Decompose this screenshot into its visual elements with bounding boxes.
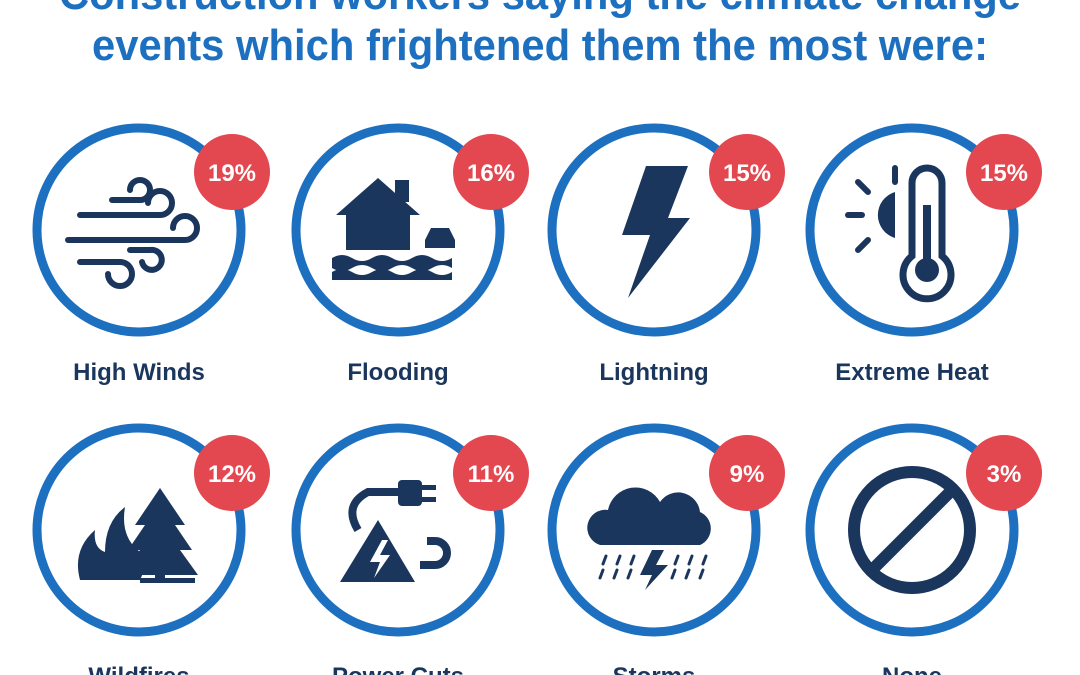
badge: 9% (730, 461, 764, 488)
panel: none (810, 428, 1042, 675)
badge (966, 134, 1042, 210)
icon: flooded house (332, 178, 455, 280)
label: Lightning (599, 359, 709, 386)
icon: fire and tree (78, 488, 198, 583)
icon: sun thermometer (848, 168, 951, 299)
label: Flooding (347, 359, 449, 386)
badge: 15% (980, 160, 1028, 187)
badge (453, 134, 529, 210)
label: High Winds (73, 359, 205, 386)
badge: 3% (987, 461, 1021, 488)
badge (709, 435, 785, 511)
panel: lightning (552, 128, 785, 386)
panel: wildfires (37, 428, 270, 675)
title (59, 0, 1021, 70)
badge (194, 134, 270, 210)
badge: 16% (467, 160, 515, 187)
badge: 19% (208, 160, 256, 187)
badge (453, 435, 529, 511)
panel: high winds (37, 128, 270, 386)
panel: extreme heat (810, 128, 1042, 386)
badge: 12% (208, 461, 256, 488)
icon: wind (68, 180, 197, 286)
title: events which frightened them the most were: (92, 21, 988, 70)
icon: lightning bolt (622, 166, 690, 298)
panel: power cuts (296, 428, 529, 675)
label: Extreme Heat (835, 359, 989, 386)
badge: 11% (468, 461, 514, 488)
badge (966, 435, 1042, 511)
panel: storms (552, 428, 785, 675)
badge: 15% (723, 160, 771, 187)
badge (709, 134, 785, 210)
panel: flooding (296, 128, 529, 386)
icon: plug and warning (340, 480, 447, 582)
icon: storm cloud (587, 487, 711, 590)
badge (194, 435, 270, 511)
icon: prohibited (854, 472, 970, 588)
